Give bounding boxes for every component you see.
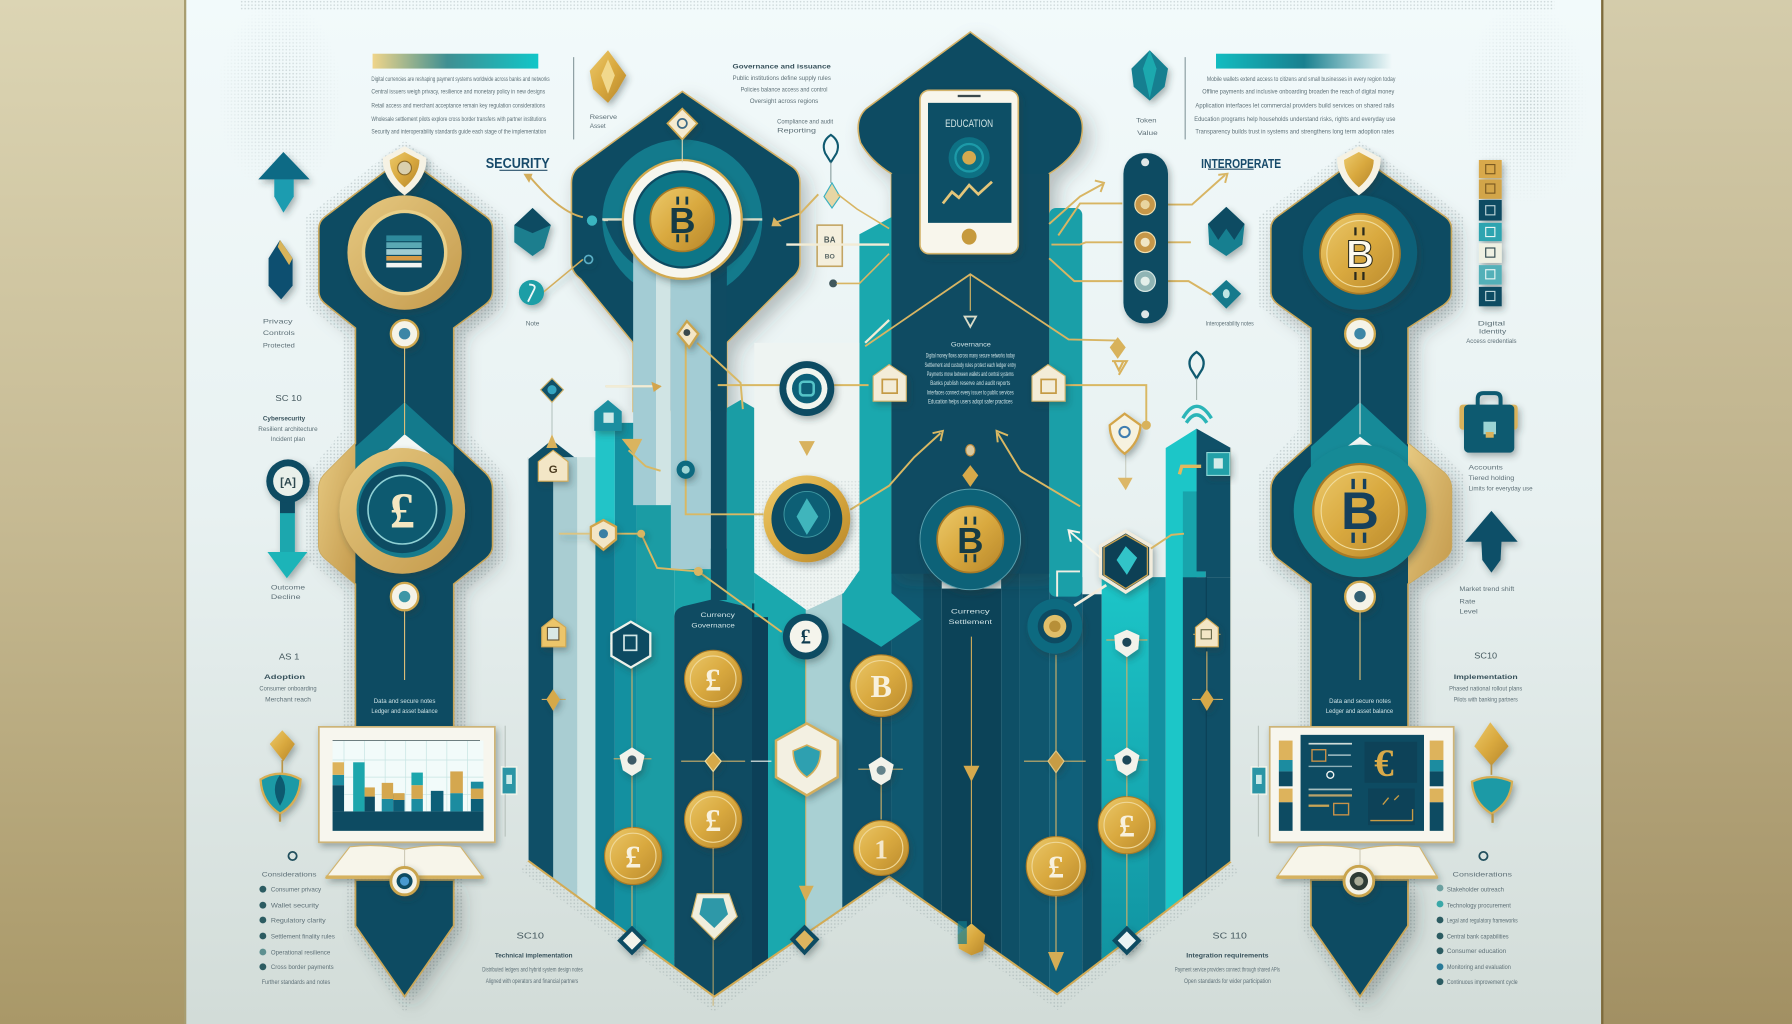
gold wing of lower hexagon [319,443,355,584]
neck caption: Data and secure notes [1329,698,1391,705]
coin: £ [1048,849,1064,885]
arrows: central gold connectors [606,343,1146,632]
text: caption under pill: Interoperability notes [1206,321,1254,328]
top right text block: Application interfaces let commercial providers build services on shared rails [1195,102,1394,109]
medallion: bitcoin coin lower [1294,445,1426,577]
text: right caption 3 [1459,586,1515,616]
text: bottom right caption: SC 110 [1213,931,1248,940]
coin [685,791,742,848]
neck caption: Data and secure notes [374,698,435,705]
top right text block [1194,54,1396,136]
list: left bullet list: Regulatory clarity [271,917,327,924]
neck caption: Ledger and asset balance [1326,708,1394,715]
icon: left small ring [288,852,297,860]
coin: 1 [874,834,888,864]
chart tag: small left tab [502,726,517,837]
text: bottom right caption: Payment service providers connect through shared APIs [1175,966,1280,973]
text: bottom left caption: Aligned with operators and financial partners [486,978,578,985]
coin [685,650,742,707]
medallion: bitcoin coin upper: B [1346,233,1374,276]
arrow: left up arrow [258,152,310,213]
medallion: pound coin: £ [390,483,415,539]
vertical line with arrow [963,637,979,923]
top left text block: Security and interoperability standards guide each stage of the implementation [371,129,547,136]
text: right caption 2: Tiered holding [1469,475,1515,482]
list: left bullet list: Consumer privacy [271,886,322,893]
text block inside tower: Payments move between wallets and central systems [927,371,1014,378]
text: right caption 4: Implementation [1454,674,1518,681]
node: right book eye [1344,866,1374,896]
text: left caption 1: Privacy [263,318,294,325]
list: left bullet list: Settlement finality rules [271,933,335,940]
icon: gold-white gem at base [691,894,737,939]
coin: central bitcoin [920,489,1021,590]
text: left caption 2 [258,394,318,443]
top left text block: Wholesale settlement pilots explore cross border transfers with partner institutions [371,116,546,123]
text: lower column caption: Governance [691,622,736,629]
medallion: bitcoin coin lower: B [1341,482,1379,541]
arrow: gold diamond and drop on right side [1110,337,1127,375]
coin [854,821,909,875]
icon: gold gem top [590,50,626,103]
panel: central phone tower [842,32,1118,955]
connector: gold bracket [1179,466,1201,474]
icon: gold diamond node [678,321,698,347]
node: top connector [391,320,418,347]
medallion: bitcoin in white ring [623,160,742,279]
text: bottom left caption [482,931,583,985]
list: right bullet list: Technology procurement [1447,902,1511,909]
text block inside tower: Digital money flows across many secure networks today [926,353,1015,360]
list: right bullet list: Stakeholder outreach [1447,886,1504,893]
text: left caption 1: Protected [263,342,295,349]
arrowheads on lines [799,886,1064,971]
text: right caption 4 [1449,651,1522,704]
text: left caption 3 [271,585,306,601]
medallion: central teal gem [763,475,850,562]
list: right bullet list: Central bank capabilities [1447,933,1509,940]
columns right group [842,429,1231,1024]
node [1114,747,1139,776]
gradient bar [373,54,538,69]
icon: briefcase [1459,393,1518,453]
icon: teal circle with curved line [519,255,593,305]
panel: right hexagonal tower [1271,146,1451,997]
icon: right small ring [1479,852,1488,860]
text: bottom right caption [1175,931,1280,985]
text: teal gem caption: Token [1136,117,1157,124]
text: right caption 4: Phased national rollout plans [1449,685,1522,692]
icon: left pin and house: G [549,464,558,476]
icon: pin and signal waves [1183,352,1211,423]
medallion: bitcoin coin upper [1303,195,1417,310]
text: INTEROPERATE heading: INTEROPERATE [1201,156,1281,171]
coin: £ [705,661,721,697]
dashboard panel: right tablet [1270,727,1454,842]
arrow: left pin with down arrow [266,459,310,578]
node [705,752,721,771]
icon: pound badge: £ [801,626,811,648]
text: left caption 2: Resilient architecture [258,426,318,433]
icon: left leaf and shield [261,730,301,822]
list: right bullet list: Monitoring and evaluation [1447,964,1511,971]
coin row: lower left coins [605,650,1155,896]
chevron lines and triangle [865,274,1118,346]
text: bottom right caption: Integration requirements [1186,953,1269,960]
text: lower column caption: Currency [701,612,736,619]
icon: cream house right [1032,365,1065,401]
text: bottom left caption: Technical implementation [495,953,573,960]
text: right caption 1: Digital [1478,321,1505,328]
arrow: right up arrow [1465,511,1518,573]
text: bottom left caption: SC10 [517,931,545,940]
connector node: gold shield on left column [559,520,703,576]
icon: small teal ring [677,461,695,479]
text: gem caption [590,114,618,130]
coin: central bitcoin: B [957,520,983,561]
text: right caption 1: Access credentials [1466,338,1517,345]
vertical connector lines [542,634,1223,1006]
text: left caption 4: Adoption [264,674,305,681]
text: gem caption: Asset [590,123,606,130]
icon: right open book [1277,846,1438,879]
text block inside tower: Governance [951,341,992,348]
icon strip: right vertical tiles [1479,160,1502,306]
teal chevron [1311,402,1408,514]
neck caption [371,698,438,715]
text: right caption 4: SC10 [1474,651,1498,660]
node: top connector [1345,319,1375,349]
list: left bullet list: Further standards and notes [262,979,330,986]
list: right bullet list [1437,872,1518,986]
icon: teal gem right [1208,207,1245,256]
text: left caption 3: Outcome [271,585,306,592]
neck caption [1326,698,1394,715]
text: left caption 2: Cybersecurity [263,416,305,423]
icon: teal diamond [1211,280,1241,309]
node [619,747,645,776]
top right text block: Education programs help households understand risks, rights and everyday use [1194,116,1396,123]
list: left bullet list: Cross border payments [271,964,334,971]
list: right bullet list: Legal and regulatory frameworks [1447,917,1518,924]
icon: left open book [326,846,483,879]
icon: dark hex badge [611,622,650,667]
top center text block: Policies balance access and control [741,86,827,93]
text: bottom right caption: Open standards for wider participation [1184,978,1271,985]
icon: pound badge [783,614,829,659]
panel: connector pill [1123,153,1168,323]
coin: £ [705,802,721,838]
coin: B [870,668,892,704]
gradient bar [1216,54,1392,69]
text block inside tower: Interfaces connect every issuer to public services [927,389,1014,396]
dashboard panel: right tablet: € [1374,742,1394,785]
list: right bullet list: Considerations [1453,872,1512,879]
medallion: list icon [347,195,462,310]
top left text block: Retail access and merchant acceptance remain key regulation considerations [371,102,545,109]
text: right caption 3: Level [1459,609,1478,616]
text: right caption 1: Identity [1479,329,1507,336]
node [1048,751,1064,773]
icon: teal gem top [1131,50,1168,101]
diamond [546,689,560,711]
text: right caption 4: Pilots with banking partners [1454,697,1518,704]
list: left bullet list: Wallet security [271,902,320,909]
neck caption: Ledger and asset balance [371,708,438,715]
top left text block: Central issuers weigh privacy, resilience and monetary policy in new designs [371,89,545,96]
coin [1098,797,1155,854]
diamond [617,926,647,955]
arrow: left pin with down arrow: [A] [280,477,296,489]
panel: left hexagonal tower [319,146,493,997]
caption below coin: Currency [951,609,991,616]
top badge [667,109,697,139]
icon: left tall crystal [269,240,293,299]
top center text block: Governance and issuance [733,64,831,71]
background: paper sheet [184,0,1603,1024]
text: teal gem caption: Value [1137,130,1158,137]
connector: dark dot with dashed trace [829,194,889,343]
arrows: phone to pill connectors [1049,174,1227,295]
house [1195,618,1218,647]
top center text block: Reporting [777,128,817,135]
text: left caption 4 [259,652,317,704]
stripes [633,251,754,600]
text: small label under teal circle: Note [526,321,540,328]
text: lower column caption [691,612,736,629]
chart panel: left bar chart [319,727,495,842]
tablet tag: small right tab [1251,726,1266,837]
connector: white-gold node at column [606,382,662,392]
icon: gold triangle [799,441,815,456]
top center text block: Oversight across regions [750,98,818,105]
text: bottom left caption: Distributed ledgers and hybrid system design notes [482,966,583,973]
diamond [1200,689,1214,711]
icon: sign post: BA [824,235,836,244]
arrow: small gold bent arrow [622,439,642,455]
text: SECURITY heading: SECURITY [486,156,550,172]
icon: gem and pin top right of hexagon [771,135,840,226]
text: gem caption: Reserve [590,114,618,121]
icon: teal house on column [594,400,622,431]
text block inside tower: Banks publish reserve and audit reports [930,380,1010,387]
text: right caption 2: Limits for everyday use [1469,485,1533,492]
top left text block [371,54,550,136]
small gold markers [962,445,978,487]
arrow: gold curve with teal drop [523,174,608,226]
text: left caption 2: SC 10 [275,394,302,403]
node: middle connector [1345,582,1375,611]
text: left caption 4: Merchant reach [265,697,311,704]
icon: teal house on right column [1207,453,1230,475]
text: left caption 1: Controls [263,330,295,337]
icon: teal gem left [514,208,551,256]
small nodes on columns [542,618,1218,785]
lower arrow tip [1311,880,1408,997]
panel: central column field [528,423,1231,1024]
icon: white hexagon with teal shield [776,723,838,795]
top right text block: Mobile wallets extend access to citizens and small businesses in every region today [1207,76,1396,83]
caption below coin: Settlement [949,619,992,626]
text: right caption 2: Accounts [1469,465,1503,472]
text: left caption 4: AS 1 [279,652,300,661]
panel: upper-left hexagon with stripes [571,91,800,600]
coin [850,655,912,717]
node [1114,630,1139,657]
medallion: ring connector [779,361,834,416]
top right text block: Offline payments and inclusive onboarding broaden the reach of digital money [1202,89,1395,96]
bottom edge diamonds [617,925,1142,955]
list: left bullet list: Considerations [262,872,317,879]
text block inside tower: Settlement and custody rules protect each ledger entry [925,362,1017,369]
text: left caption 1 [263,318,295,349]
list: left bullet list: Operational resilience [271,949,331,956]
medallion: pound coin [339,448,465,574]
medallion: bitcoin in white ring: B [669,200,695,241]
columns left group [528,423,842,1024]
lower arrow tip [355,880,454,997]
node: middle connector [391,583,418,610]
gold gem at bottom [958,921,985,955]
top right text block: Transparency builds trust in systems and strengthens long term adoption rates [1195,129,1394,136]
diamond [790,925,819,955]
text: left caption 4: Consumer onboarding [259,685,317,692]
text block inside tower: Education helps users adopt safer practices [928,398,1013,405]
text block inside tower [925,341,1017,405]
top left text block: Digital currencies are reshaping payment systems worldwide across banks and networks [371,76,550,83]
text: right caption 3: Market trend shift [1459,586,1515,593]
icon: shield pin and arrow on right [1110,414,1151,490]
icon: sign post: BO [825,253,836,260]
house [542,618,566,647]
icon: cream house left [873,365,906,401]
icon: dark hexagon with teal glyph [1101,531,1151,592]
teal chevron [355,402,454,514]
caption below coin [949,609,992,626]
list: right bullet list: Consumer education [1447,948,1507,955]
text: right caption 3: Rate [1459,598,1476,605]
paper cut-out beneath left medallion [754,343,859,610]
coin: £ [1119,808,1135,844]
arrows: around dark hexagon [1057,530,1184,606]
icon: sign post [786,225,889,266]
coin: £ [625,838,641,874]
node: left book eye [391,867,418,895]
icon: left pin and house [538,378,568,481]
coin [1026,837,1086,896]
top center text block [733,64,833,135]
top center text block: Compliance and audit [777,118,833,125]
shield badge [383,146,426,195]
icon: smartphone [920,90,1018,254]
text: right caption 2 [1469,465,1533,492]
diamond [1112,926,1142,955]
shield badge [1337,146,1381,195]
node [869,757,894,785]
list: right bullet list: Continuous improvement cycle [1447,979,1518,986]
text: teal gem caption [1136,117,1158,137]
text: right caption 1 [1466,321,1517,345]
list: left bullet list [259,872,335,986]
coin [605,827,662,885]
gold wing of lower hexagon [1408,443,1451,584]
top center text block: Public institutions define supply rules [733,75,831,82]
medallion: lower-right gold ring [1027,599,1082,654]
text: left caption 2: Incident plan [271,436,306,443]
icon: smartphone: EDUCATION [945,118,993,130]
text: left caption 3: Decline [271,594,301,601]
icon: right leaf and shield [1472,722,1512,823]
